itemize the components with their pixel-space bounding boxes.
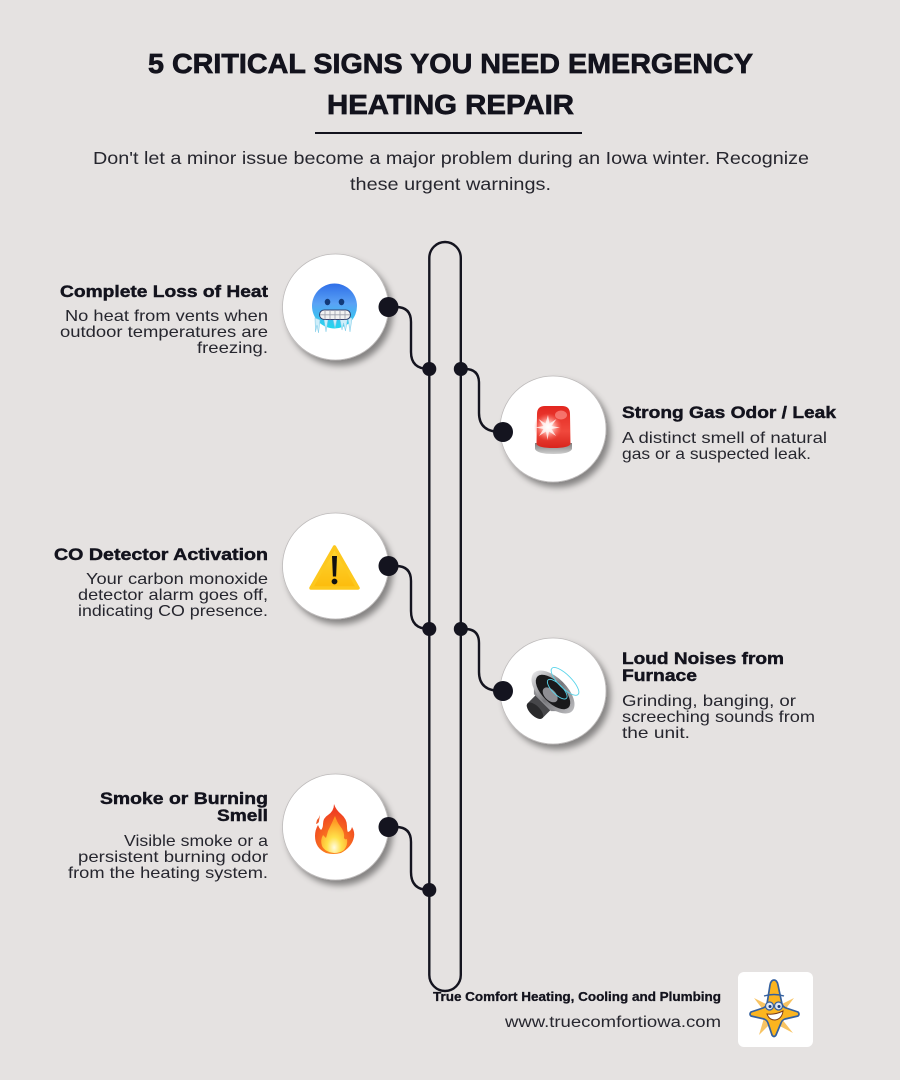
description: smoke or burning smell — [68, 833, 269, 882]
heading: loud noises from furnace — [622, 649, 784, 685]
description: CO detector activation — [78, 571, 268, 620]
panel: CO detector activation — [54, 513, 436, 636]
description: smoke or burning smell: persistent burning odor — [78, 849, 269, 866]
panel: loud noises from furnace — [454, 622, 815, 744]
panel: strong gas odor — [454, 362, 837, 482]
description: loud noises from furnace: Grinding, banging, or — [622, 693, 797, 710]
connector: smoke or burning smell — [378, 817, 436, 897]
description: strong gas odor — [622, 430, 827, 463]
description: complete loss of heat: No heat from vents when — [65, 308, 268, 325]
footer company name: True Comfort Heating, Cooling and Plumbing — [433, 990, 721, 1004]
description: loud noises from furnace: screeching sounds from — [622, 709, 815, 726]
icon circle: flame — [282, 774, 388, 880]
icon circle: speaker — [500, 638, 606, 744]
description: smoke or burning smell: Visible smoke or a — [124, 833, 268, 850]
subtitle: Don't let a minor issue become a major problem during an Iowa winter. Recognize — [93, 148, 809, 168]
heading: loud noises from furnace: Furnace — [622, 666, 697, 685]
icon circle: cold face — [282, 254, 388, 360]
subtitle: these urgent warnings. — [350, 174, 551, 194]
connector: loud noises from furnace — [454, 622, 513, 701]
description: loud noises from furnace: the unit. — [622, 725, 690, 742]
heading: strong gas odor: Strong Gas Odor / Leak — [622, 403, 837, 422]
heading: smoke or burning smell: Smoke or Burning — [100, 789, 268, 808]
description: CO detector activation: indicating CO presence. — [78, 603, 268, 620]
heading: CO detector activation: CO Detector Activation — [54, 545, 268, 564]
description: CO detector activation: Your carbon monoxide — [86, 571, 268, 588]
description: complete loss of heat: outdoor temperatures are — [60, 324, 268, 341]
logo: smiling star mascot — [738, 972, 813, 1047]
title: 5 CRITICAL SIGNS YOU NEED EMERGENCY — [148, 48, 753, 79]
panel: complete loss of heat — [60, 254, 436, 376]
connector: CO detector activation — [378, 556, 436, 636]
icon circle: red siren — [500, 376, 606, 482]
connector: complete loss of heat — [378, 297, 436, 376]
heading: smoke or burning smell: Smell — [217, 806, 268, 825]
description: complete loss of heat — [60, 308, 268, 357]
description: CO detector activation: detector alarm goes off, — [78, 587, 268, 604]
central timeline track — [429, 242, 461, 991]
subtitle — [93, 148, 809, 194]
description: smoke or burning smell: from the heating system. — [68, 865, 268, 882]
description: strong gas odor: gas or a suspected leak. — [622, 446, 811, 463]
description: complete loss of heat: freezing. — [197, 340, 268, 357]
heading: smoke or burning smell — [100, 789, 268, 825]
title: HEATING REPAIR — [327, 89, 574, 120]
connector: strong gas odor — [454, 362, 513, 442]
footer website: www.truecomfortiowa.com — [504, 1014, 721, 1031]
icon circle: warning sign — [282, 513, 388, 619]
heading: complete loss of heat: Complete Loss of Heat — [60, 282, 268, 301]
description: loud noises from furnace — [622, 693, 815, 742]
panel: smoke or burning smell — [68, 774, 436, 897]
heading: loud noises from furnace: Loud Noises from — [622, 649, 784, 668]
description: strong gas odor: A distinct smell of natural — [622, 430, 827, 447]
title — [148, 48, 753, 120]
